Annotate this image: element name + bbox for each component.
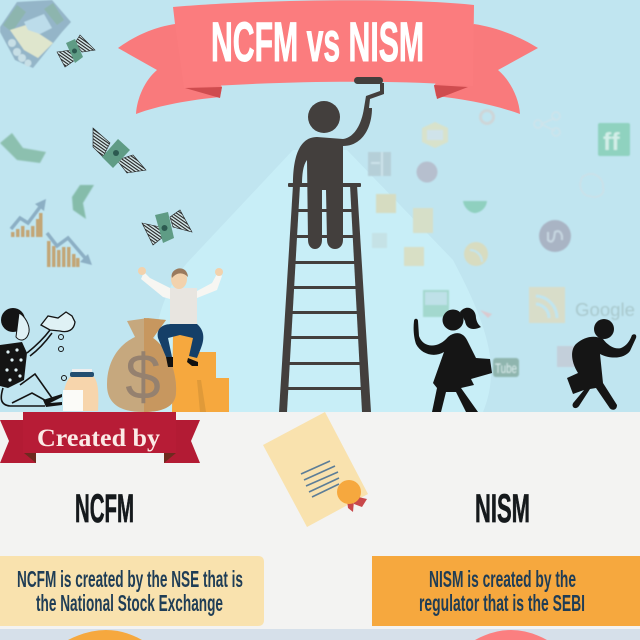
icon: small square bbox=[372, 233, 387, 248]
light cone behind painter bbox=[150, 150, 491, 412]
faded social icons bbox=[368, 110, 635, 377]
icon: grey square bbox=[557, 346, 583, 367]
icon: round grey bbox=[416, 162, 438, 182]
ladder bbox=[279, 183, 371, 412]
icon: banknote curled bbox=[72, 185, 94, 219]
icon: falling chart bbox=[47, 233, 92, 267]
created by ribbon bbox=[0, 412, 200, 463]
icon: news page bbox=[368, 152, 391, 176]
painter figure bbox=[293, 83, 384, 249]
icon: stumbleupon bbox=[539, 220, 571, 252]
money bag bbox=[107, 318, 176, 413]
bottom panel bbox=[0, 412, 640, 629]
pink circle bbox=[475, 630, 547, 640]
icon: rss circle bbox=[464, 242, 488, 266]
icon: hexagon badge bbox=[422, 122, 448, 148]
orange circle bbox=[68, 630, 142, 640]
icon: cloud square bbox=[376, 194, 396, 213]
coin jar bbox=[63, 369, 98, 411]
icon: share bbox=[534, 112, 560, 136]
boy with piggy bank bbox=[0, 308, 75, 407]
bottom band bbox=[0, 629, 640, 640]
title ribbon bbox=[118, 0, 538, 114]
icon: refresh circle bbox=[480, 110, 494, 124]
icon: monitor bbox=[423, 290, 449, 317]
dollar sign: $ bbox=[125, 341, 161, 413]
NCFM description box: the National Stock Exchange bbox=[36, 590, 223, 616]
icon: flying money top bbox=[57, 35, 95, 67]
title text: NCFM vs NISM bbox=[211, 10, 424, 73]
NCFM description box bbox=[0, 556, 264, 626]
icon: phone arc bbox=[463, 201, 487, 213]
icon: banknote left bbox=[0, 133, 46, 163]
icon: youtube: Tube bbox=[495, 360, 517, 376]
businessman silhouette bbox=[567, 319, 636, 410]
gold coin stacks bbox=[172, 333, 229, 412]
word: Google: Google bbox=[575, 300, 635, 320]
icon: flying money middle bbox=[93, 128, 146, 173]
man sitting on money bbox=[138, 267, 223, 367]
icon: handshake bbox=[0, 0, 71, 68]
icon: youtube bbox=[493, 358, 519, 377]
icon: friendfeed bbox=[598, 123, 630, 156]
girl silhouette bbox=[414, 308, 492, 412]
NCFM description box: NCFM is created by the NSE that is bbox=[17, 566, 243, 592]
icon: rising chart bbox=[11, 199, 46, 237]
icon: tall square bbox=[413, 208, 433, 233]
icon: flying money right bbox=[142, 210, 192, 245]
icon: small pink mark bbox=[480, 310, 492, 318]
NISM heading: NISM bbox=[475, 487, 530, 531]
icon: certificate bbox=[263, 412, 368, 527]
roller head bbox=[354, 77, 383, 84]
icon: f square bbox=[404, 247, 424, 266]
created by text: Created by bbox=[37, 425, 161, 452]
paint roller handle bbox=[364, 83, 384, 108]
icon: skype bbox=[580, 174, 604, 197]
NCFM heading: NCFM bbox=[75, 487, 134, 531]
icon: rss square bbox=[529, 287, 565, 323]
icon: friendfeed: ff bbox=[603, 128, 620, 156]
NISM description box bbox=[372, 556, 640, 626]
sky background bbox=[0, 0, 640, 413]
